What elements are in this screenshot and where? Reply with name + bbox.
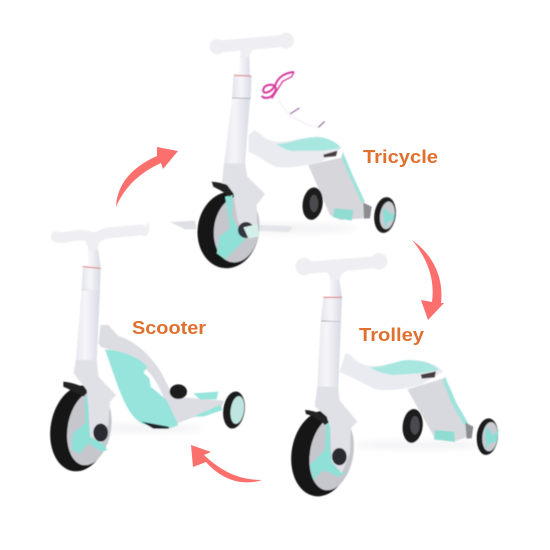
handlebar <box>295 253 387 282</box>
main tube <box>315 322 341 410</box>
label: Trolley: Trolley <box>359 325 424 345</box>
fork and mudguard <box>212 182 233 197</box>
rear wheels and deck <box>170 384 187 399</box>
front wheel <box>44 381 116 476</box>
fork and mudguard <box>63 382 88 397</box>
battery deck <box>308 157 365 220</box>
ground shadow <box>77 424 203 433</box>
tricycle scooter <box>170 33 398 272</box>
arrow: scooter to tricycle <box>116 147 178 207</box>
scooter <box>44 221 247 476</box>
pedals <box>170 221 197 229</box>
seat body <box>249 130 342 167</box>
fork and mudguard <box>305 410 330 425</box>
battery deck <box>407 378 468 442</box>
seat body <box>339 353 443 390</box>
ground shadow <box>353 440 487 450</box>
stem and collar <box>82 250 101 290</box>
frame <box>98 325 224 423</box>
stem and collar <box>321 280 342 322</box>
label: Tricycle: Tricycle <box>363 147 438 167</box>
ground shadow <box>210 223 357 234</box>
stem and collar <box>232 57 252 98</box>
main tube <box>222 99 250 187</box>
front wheel <box>193 188 264 272</box>
teal body <box>105 349 178 429</box>
rear wheels <box>401 408 424 444</box>
label: Scooter: Scooter <box>132 318 206 338</box>
handlebar <box>210 33 294 59</box>
rear wheels <box>300 186 325 221</box>
main tube <box>73 290 100 383</box>
arrow: trolley to scooter <box>191 445 262 482</box>
trolley scooter <box>285 253 500 501</box>
handlebar <box>56 221 149 252</box>
clef and notes <box>262 72 325 127</box>
front wheel <box>285 405 359 501</box>
arrow: tricycle to trolley <box>412 240 444 320</box>
